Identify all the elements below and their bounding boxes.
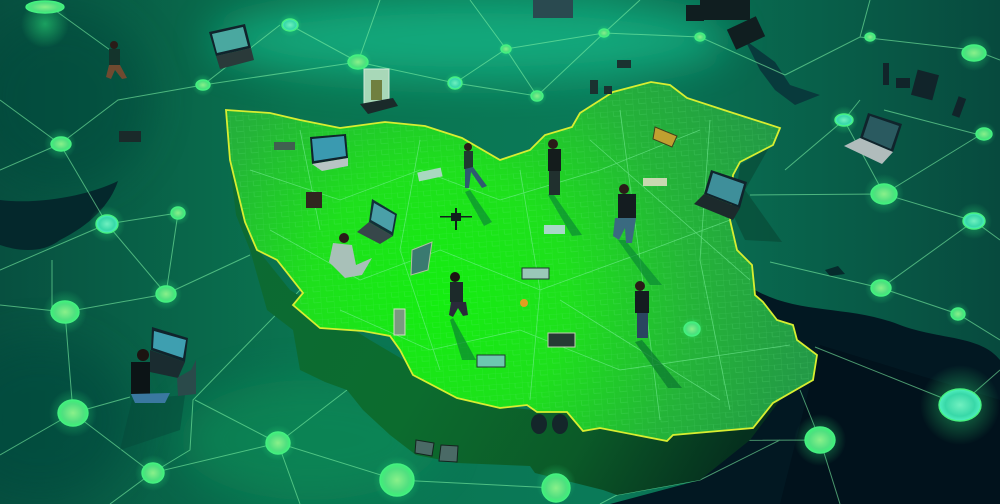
device: card one bbox=[417, 168, 443, 181]
dark water: lower right bbox=[610, 290, 1000, 504]
person 3 bbox=[613, 184, 662, 285]
device: card four bbox=[522, 268, 549, 279]
laptop: upper left bbox=[209, 24, 254, 69]
small gadget top bbox=[590, 60, 631, 94]
people bbox=[106, 41, 682, 450]
device: card two bbox=[643, 178, 667, 186]
laptop: upper centre bbox=[310, 134, 348, 171]
person 5 bbox=[449, 272, 476, 360]
device: small card bbox=[274, 142, 295, 150]
device top centre bbox=[533, 0, 573, 18]
small gadget left bbox=[119, 131, 141, 142]
person 1 bbox=[464, 143, 492, 226]
device: console bbox=[548, 333, 575, 347]
equipment cluster right bbox=[883, 63, 966, 118]
robot small bbox=[306, 192, 322, 208]
road texture on land bbox=[226, 82, 815, 439]
person far left bbox=[106, 41, 127, 79]
goggles bottom bbox=[531, 414, 568, 434]
laptop: upper right bbox=[844, 113, 902, 164]
person 4 bbox=[635, 281, 682, 388]
tablet bbox=[411, 242, 432, 275]
devices off the map bbox=[119, 0, 966, 164]
dark water: upper right inlet bbox=[745, 40, 820, 105]
dark water: left bay bbox=[0, 181, 118, 250]
ball bbox=[520, 299, 528, 307]
small units bottom bbox=[415, 440, 458, 462]
laptop: right bbox=[694, 170, 747, 220]
landmass: side wall bbox=[228, 150, 815, 495]
drone bbox=[440, 208, 472, 230]
laptop: left bbox=[357, 199, 397, 244]
islet bbox=[825, 266, 845, 276]
laptops on the map bbox=[274, 127, 747, 462]
landmass: glowing top bbox=[226, 82, 817, 441]
device: tablet top bbox=[653, 127, 677, 147]
person 6 seated bbox=[329, 233, 372, 278]
phone bbox=[394, 309, 405, 335]
wall shadow: upper right bbox=[733, 128, 782, 242]
device: card five bbox=[477, 355, 505, 367]
device: card three bbox=[544, 225, 565, 234]
person 7 with laptop bbox=[120, 327, 196, 450]
robot top right bbox=[686, 0, 765, 50]
kiosk bbox=[360, 69, 398, 114]
person 2 bbox=[548, 139, 582, 236]
